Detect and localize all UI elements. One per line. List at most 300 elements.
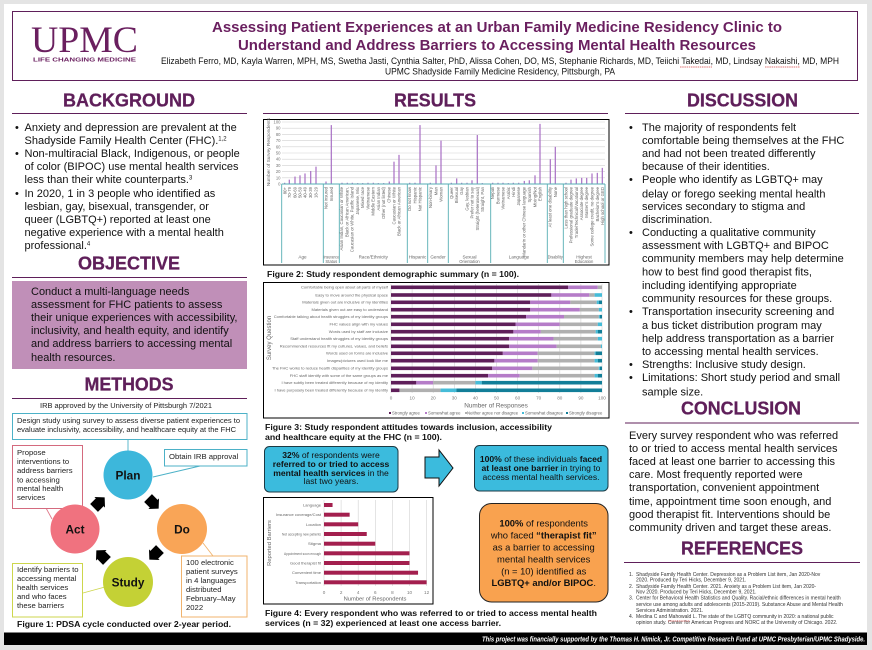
arrow: plan to do bbox=[143, 493, 164, 514]
reference list: Shadyside Family Health Center. Depression as a Problem List item, Jan 2020-Nov bbox=[636, 572, 821, 578]
reference list: 1. bbox=[629, 572, 633, 578]
reference list: Services Administration. 2021. bbox=[636, 608, 703, 614]
callout: electronic surveys: 2022 bbox=[186, 603, 203, 612]
chart: reported barriers bars: 8 bbox=[391, 590, 394, 595]
callout: therapist fit: as a barrier to accessing bbox=[493, 542, 595, 552]
legend: Neither agree nor disagree bbox=[467, 411, 519, 416]
category tick labels: Some college credit, no degree bbox=[590, 186, 594, 246]
category group labels: Orientation bbox=[459, 259, 480, 264]
authors: UPMC Shadyside Family Medicine Residency, Pittsburgh, PA bbox=[385, 66, 615, 76]
background bullets: negative experience with a mental health bbox=[24, 227, 224, 239]
conclusion text bbox=[629, 430, 838, 534]
callout: therapist fit: 100% of respondents bbox=[499, 518, 588, 528]
barrier labels: Good therapist fit bbox=[290, 560, 322, 565]
chart: attitudes stacked bars: 80 bbox=[557, 396, 563, 400]
category tick labels: Insured bbox=[329, 186, 334, 201]
background bullets: • bbox=[15, 188, 19, 200]
callout: electronic surveys bbox=[182, 556, 247, 617]
category tick labels: Gay, lesbian bbox=[464, 186, 470, 211]
circle: act: Act bbox=[65, 522, 85, 536]
category tick labels: Vietnamese bbox=[500, 186, 506, 210]
discussion bullets: Conducting a qualitative community bbox=[642, 227, 816, 239]
conclusion text: to or tried to access mental health services bbox=[629, 443, 838, 455]
conclusion text: good therapist fit. Interventions should be bbox=[629, 509, 830, 521]
callout: 32 percent referred: mental health services in the bbox=[273, 468, 389, 478]
barrier labels: Transportation bbox=[295, 580, 321, 585]
barrier labels: Convenient time bbox=[292, 570, 322, 575]
callout: propose interventions: address barriers bbox=[17, 466, 73, 475]
conclusion text: transportation, convenient appointment bbox=[629, 482, 819, 494]
chart: attitudes stacked bars: 10 bbox=[410, 396, 415, 400]
arrow: study to act bbox=[91, 545, 112, 566]
barrier labels: Insurance coverage/Cost bbox=[276, 512, 322, 517]
chart: reported barriers bars: 6 bbox=[374, 590, 377, 595]
authors bbox=[161, 56, 839, 76]
category tick labels: Bachelor's degree bbox=[595, 186, 600, 222]
discussion bullets: discrimination. bbox=[642, 214, 712, 226]
discussion bullets: Transportation insecurity screening and bbox=[642, 306, 834, 318]
discussion bullets: Strengths: Inclusive study design. bbox=[642, 359, 806, 371]
conclusion text: Every survey respondent who was referred bbox=[629, 430, 838, 442]
header banner bbox=[12, 12, 858, 80]
category tick labels: High school or GED bbox=[600, 187, 605, 225]
callout: propose interventions: to accessing bbox=[17, 476, 60, 484]
background bullets: 4 bbox=[87, 242, 91, 248]
discussion bullets: • bbox=[629, 372, 633, 384]
category tick labels: Less than high school bbox=[564, 187, 568, 229]
category group labels: Insurance bbox=[324, 254, 339, 260]
chart: demographic summary bars: 70 bbox=[276, 138, 281, 143]
panel: results bbox=[263, 90, 609, 628]
panel: methods bbox=[12, 374, 247, 629]
callout: therapist fit: who faced “therapist fit” bbox=[490, 530, 597, 540]
category tick labels: Caucasian or White, Pacific Island bbox=[350, 186, 354, 252]
chart: reported barriers bars: 4 bbox=[357, 590, 360, 595]
callout: therapist fit: mental health services bbox=[497, 554, 591, 564]
callout: 100 percent faced barrier bbox=[474, 446, 608, 491]
callout: 32 percent referred bbox=[264, 446, 398, 492]
background bullets: • bbox=[15, 122, 19, 134]
chart: demographic summary bars: 20 bbox=[276, 169, 281, 174]
callout: identify barriers: and who faces bbox=[17, 592, 67, 601]
discussion bullets: assessment with LGBTQ+ and BIPOC bbox=[642, 240, 829, 252]
category tick labels: Mixing/Not bbox=[532, 186, 538, 207]
background bullets: In 2020, 1 in 3 people who identified as bbox=[24, 188, 216, 200]
panel: conclusion bbox=[625, 398, 859, 534]
survey question labels: Recommended resources fit my cultures, values, and beliefs bbox=[280, 344, 388, 349]
category tick labels: Spanish bbox=[527, 186, 532, 203]
survey question labels: Comfortable being open about all parts of myself bbox=[301, 285, 389, 290]
footer funding bar bbox=[4, 632, 867, 645]
background bullets: Anxiety and depression are prevalent at the bbox=[24, 122, 237, 134]
category tick labels: Queer bbox=[449, 186, 454, 199]
barrier labels: Appointment soon enough bbox=[284, 551, 321, 556]
barrier labels: Stigma bbox=[308, 541, 322, 546]
survey question labels: Words used by staff are inclusive bbox=[329, 329, 389, 334]
chart: reported barriers bars: 10 bbox=[407, 590, 412, 595]
callout: identify barriers: health services bbox=[17, 583, 68, 592]
heading: methods: METHODS bbox=[84, 374, 174, 394]
survey question labels: Easy to move around the physical space bbox=[315, 292, 389, 297]
category tick labels: Asian Indian, Caucasian or White bbox=[339, 186, 344, 251]
category tick labels: Middle Eastern bbox=[370, 186, 376, 216]
logo: UPMC: UPMC bbox=[31, 20, 138, 61]
reference list: opinion study. Center for American Progress and NORC at the University of Chicago. 2022. bbox=[636, 620, 837, 626]
discussion bullets: Limitations: Short study period and small bbox=[642, 372, 840, 384]
panel: background bbox=[12, 90, 247, 252]
category group labels: Gender bbox=[430, 254, 446, 260]
heading: references: REFERENCES bbox=[681, 538, 803, 558]
circle: do bbox=[157, 504, 207, 554]
discussion bullets: community members may help determine bbox=[642, 253, 844, 265]
category tick labels: Japanese bbox=[516, 186, 521, 206]
category tick labels: Chinese bbox=[386, 186, 392, 203]
category group labels bbox=[298, 254, 594, 264]
chart: demographic summary bars: 40 bbox=[276, 157, 281, 162]
category tick labels: Burmese bbox=[496, 186, 500, 204]
category group labels: Status bbox=[325, 259, 337, 264]
background bullets: 1,2 bbox=[218, 136, 227, 142]
reference list: 3. bbox=[629, 596, 633, 602]
category tick labels: At least one disability bbox=[548, 186, 552, 227]
background bullets: 3 bbox=[189, 176, 193, 182]
chart: demographic summary bars: 0 bbox=[278, 182, 281, 186]
discussion bullets: People who identify as LGBTQ+ may bbox=[642, 174, 823, 186]
caption: figure 2: Figure 2: Study respondent demographic summary (n = 100). bbox=[267, 269, 519, 279]
title: Assessing Patient Experiences at an Urban Family Medicine Residency Clinic to bbox=[212, 20, 782, 36]
callout: design study: Design study using survey to assess diverse patient experiences to bbox=[17, 416, 240, 425]
discussion bullets: • bbox=[629, 122, 633, 134]
survey question labels: Materials given out are easy to understand bbox=[312, 307, 388, 312]
background bullets: less than their white counterparts. bbox=[24, 174, 189, 186]
arrow: act to plan bbox=[89, 492, 110, 513]
conclusion text: faced at least one barrier to accessing this bbox=[629, 456, 836, 468]
caption: figure 3: Figure 3: Study respondent attitudes towards inclusion, accessibility bbox=[265, 422, 552, 432]
discussion bullets: delay or forego seeking mental health bbox=[642, 188, 825, 200]
discussion bullets: services secondary to stigma and bbox=[642, 201, 805, 213]
circle: plan: Plan bbox=[116, 468, 140, 482]
callout: electronic surveys: distributed bbox=[186, 585, 221, 594]
background bullets: Shadyside Family Health Center (FHC). bbox=[24, 135, 218, 147]
discussion bullets: because of their identities. bbox=[642, 161, 770, 173]
category group labels: Education bbox=[575, 259, 594, 264]
category tick labels: Straight, Pan bbox=[480, 186, 485, 212]
objective box: their unique experiences with accessibility, bbox=[31, 312, 237, 324]
reference list: Shadyside Family Health Center. 2021. Anxiety as a Problem List item, Jan 2020- bbox=[636, 584, 816, 590]
category tick labels: English bbox=[538, 186, 542, 201]
background bullets: professional. bbox=[24, 240, 87, 252]
callout: therapist fit: LGBTQ+ and/or BIPOC. bbox=[491, 577, 596, 588]
reference list: 4. bbox=[629, 614, 633, 620]
caption: figure 3 bbox=[265, 422, 552, 442]
category group labels: Disability bbox=[548, 254, 563, 260]
panel: objective bbox=[12, 254, 247, 369]
category tick labels: 80+ bbox=[282, 187, 288, 194]
category tick labels: 40-49 bbox=[302, 186, 308, 198]
title: Understand and Address Barriers to Accessing Mental Health Resources bbox=[238, 38, 756, 54]
discussion bullets: sample size. bbox=[642, 386, 703, 398]
objective box bbox=[12, 281, 247, 369]
category tick labels: Associate degree bbox=[579, 186, 584, 220]
chart: demographic summary bars: 90 bbox=[276, 126, 281, 131]
survey question labels: Images/pictures used look like me bbox=[327, 358, 389, 363]
logo: UPMC: LIFE CHANGING MEDICINE bbox=[33, 58, 136, 64]
chart: reported barriers bars: 2 bbox=[340, 590, 343, 595]
legend: Strongly disagree bbox=[569, 411, 603, 416]
chart: demographic summary bars: 30 bbox=[276, 163, 281, 168]
callout: 32 percent referred: last two years. bbox=[304, 476, 358, 486]
callout: 32 percent referred: 32% of respondents were bbox=[282, 450, 380, 460]
category tick labels: Mixed race bbox=[360, 186, 365, 208]
authors: Elizabeth Ferro, MD, Kayla Warren, MPH, MS, Swetha Jasti, Cynthia Salter, PhD, Alissa Cohen, DO, MS, Stephanie Richards, MD, Teiichi Takedai, MD, Lindsay Nakaishi, MD, MPH bbox=[161, 56, 839, 66]
category group labels: Language bbox=[509, 254, 530, 260]
category tick labels: 60-69 bbox=[292, 186, 298, 198]
discussion bullets bbox=[629, 122, 844, 398]
callout: propose interventions: Propose bbox=[17, 448, 46, 457]
callout: 32 percent referred: referred to or tried to access bbox=[273, 459, 389, 469]
heading: conclusion: CONCLUSION bbox=[681, 398, 801, 418]
panel: references bbox=[624, 538, 860, 626]
objective box: Conduct a multi-language needs bbox=[31, 286, 190, 298]
callout: 100 percent faced barrier: access mental health services. bbox=[482, 472, 600, 482]
chart: attitudes stacked bars: 60 bbox=[515, 396, 521, 400]
survey question labels: The FHC works to reduce health disparities of my identity groups bbox=[272, 366, 388, 371]
discussion bullets: a bus ticket distribution program may bbox=[642, 320, 822, 332]
chart: attitudes stacked bars: 20 bbox=[431, 396, 436, 400]
chart: demographic summary bars: 50 bbox=[276, 150, 281, 156]
category tick labels: 18-29 bbox=[314, 186, 318, 198]
category tick labels: Bisexual bbox=[454, 187, 459, 203]
callout: electronic surveys: 100 electronic bbox=[186, 558, 234, 567]
discussion bullets: help address transportation as a barrier bbox=[642, 333, 834, 345]
category tick labels: Non-binary bbox=[428, 186, 433, 208]
callout: electronic surveys: patient surveys bbox=[186, 567, 238, 576]
chart: reported barriers bars: 0 bbox=[323, 590, 326, 595]
chart: reported barriers bars: 12 bbox=[424, 590, 430, 595]
survey question labels: Words used on forms are inclusive bbox=[326, 351, 389, 356]
survey question labels: I have purposely been treated differently because of my identity bbox=[274, 388, 389, 393]
reference list: service use among adults and adolescents (2015-2019). Substance Abuse and Mental Health bbox=[636, 602, 843, 608]
heading: background: BACKGROUND bbox=[63, 90, 195, 110]
category group labels: Highest bbox=[576, 254, 593, 260]
chart: reported barriers bars: Reported Barriers bbox=[267, 520, 273, 566]
callout: therapist fit bbox=[480, 504, 608, 602]
category tick labels: Caucasian or White bbox=[392, 186, 396, 224]
chart: reported barriers bars bbox=[264, 498, 433, 604]
category tick labels: Other (not listed) bbox=[381, 186, 386, 219]
IRB note: IRB approved by the University of Pittsburgh 7/2021 bbox=[40, 401, 212, 410]
circle: act bbox=[50, 504, 100, 554]
category tick labels: Not Hispanic bbox=[418, 186, 422, 211]
callout: design study bbox=[12, 414, 247, 440]
objective box: health resources. bbox=[31, 352, 115, 364]
legend bbox=[389, 411, 603, 416]
category tick labels: Straight (heterosexual) bbox=[475, 186, 480, 230]
reference list: Nov 2020. Produced by Teri Hicks, December 9, 2021. bbox=[636, 590, 757, 596]
category group labels: Hispanic bbox=[409, 254, 427, 260]
chart: attitudes stacked bars: 50 bbox=[494, 396, 499, 400]
circle: do: Do bbox=[174, 522, 190, 536]
survey question labels: I have subtly been treated differently because of my identity bbox=[281, 380, 389, 385]
objective box: inclusivity, and health equity, and identify bbox=[31, 325, 229, 337]
chart: attitudes stacked bars bbox=[264, 282, 609, 418]
callout: 100 percent faced barrier: at least one barrier in trying to bbox=[482, 463, 601, 473]
callout: propose interventions: mental health bbox=[17, 484, 63, 493]
category tick labels: Master's degree bbox=[584, 186, 589, 218]
discussion bullets: • bbox=[629, 174, 633, 186]
circle: plan bbox=[104, 450, 152, 500]
legend: Strongly agree bbox=[392, 411, 421, 416]
background bullets: Non-multiracial Black, Indigenous, or people bbox=[24, 148, 240, 160]
category tick labels: Black or African American bbox=[396, 186, 402, 236]
caption: figure 4: Figure 4: Every respondent who was referred to or tried to access mental health bbox=[265, 608, 597, 618]
category tick labels: Black or African American, bbox=[344, 187, 350, 237]
callout: identify barriers: these barriers bbox=[17, 601, 64, 610]
category tick labels: 70-79 bbox=[287, 186, 292, 198]
reference list: 2020. Produced by Teri Hicks, December 9, 2021. bbox=[636, 578, 746, 584]
survey question labels: FHC staff identify with some of the same groups as me bbox=[290, 373, 389, 378]
title bbox=[212, 20, 782, 54]
category tick labels: Asian Indian bbox=[376, 186, 381, 211]
reference list bbox=[629, 572, 843, 626]
caption: figure 3: and healthcare equity at the FHC (n = 100). bbox=[265, 432, 442, 442]
category tick labels: 30-39 bbox=[308, 186, 313, 198]
category tick labels: 50-59 bbox=[298, 186, 302, 198]
discussion bullets: how to best find good therapist fits, bbox=[642, 266, 812, 278]
chart: demographic summary bars: 10 bbox=[276, 175, 281, 180]
callout: therapist fit: (n = 10) identified as bbox=[501, 566, 587, 576]
circle: study: Study bbox=[112, 576, 145, 590]
category tick labels: Man bbox=[434, 186, 438, 195]
callout: propose interventions: services bbox=[17, 493, 45, 502]
chart: demographic summary bars bbox=[264, 117, 609, 265]
background bullets: lesbian, gay, bisexual, transgender, or bbox=[24, 201, 209, 213]
chart: demographic summary bars: 60 bbox=[276, 144, 281, 149]
reference list: 2. bbox=[629, 584, 633, 590]
chart: attitudes stacked bars: 90 bbox=[578, 396, 584, 400]
caption: figure 4 bbox=[265, 608, 597, 628]
category tick labels: Trade/Technical/Vocational bbox=[574, 187, 579, 238]
discussion bullets: and had not been treated differently bbox=[642, 148, 816, 160]
background bullets: • bbox=[15, 148, 19, 160]
category tick labels: Nepali bbox=[490, 187, 495, 199]
conclusion text: time, appointment time soon enough, and bbox=[629, 496, 831, 508]
caption: figure 4: services (n = 32) experienced at least one access barrier. bbox=[265, 618, 501, 628]
barrier labels bbox=[276, 502, 322, 585]
callout: obtain IRB: Obtain IRB approval bbox=[169, 452, 239, 461]
category tick labels: Hindi bbox=[511, 187, 516, 197]
reference list: Center for Behavioral Health Statistics and Quality. Racial/ethnic differences in mental health bbox=[636, 596, 841, 602]
callout: 100 percent faced barrier: 100% of these individuals faced bbox=[480, 454, 602, 464]
discussion bullets: to accessing mental health services. bbox=[642, 346, 819, 358]
callout: identify barriers bbox=[12, 564, 82, 617]
category group labels: Sexual bbox=[462, 254, 477, 260]
category tick labels: Do not know bbox=[407, 186, 412, 211]
chart: reported barriers bars: Number of Respondents bbox=[344, 596, 407, 602]
heading: objective: OBJECTIVE bbox=[78, 254, 180, 274]
callout: identify barriers: accessing mental bbox=[17, 574, 77, 583]
arrow: to barrier callout bbox=[425, 450, 453, 486]
legend: Somewhat agree bbox=[428, 411, 461, 416]
background bullets: of color (BIPOC) use mental health services bbox=[24, 161, 239, 173]
chart: attitudes stacked bars: 70 bbox=[536, 396, 542, 400]
survey question labels: Comfortable talking about health struggles of my identity groups bbox=[274, 314, 388, 319]
chart: demographic summary bars: 100 bbox=[274, 120, 281, 124]
category tick labels bbox=[282, 186, 605, 257]
chart: attitudes stacked bars: Survey Question bbox=[267, 316, 273, 360]
category tick labels: Japanese, Mix bbox=[355, 186, 360, 215]
callout: identify barriers: Identify barriers to bbox=[17, 565, 79, 574]
callout: propose interventions bbox=[12, 446, 82, 508]
arrow: do to study bbox=[144, 544, 165, 565]
category tick labels: Not insured bbox=[324, 186, 328, 209]
chart: attitudes stacked bars: 100 bbox=[598, 396, 606, 400]
chart: attitudes stacked bars: 0 bbox=[390, 396, 393, 400]
connector lines bbox=[46, 439, 213, 593]
objective box: and address barriers to accessing mental bbox=[31, 338, 232, 350]
category tick labels: Gay bbox=[459, 186, 464, 195]
discussion bullets: • bbox=[629, 306, 633, 318]
callout: design study: evaluate inclusivity, accessibility, and healthcare equity at the FHC bbox=[17, 425, 236, 434]
callout: electronic surveys: in 4 languages bbox=[186, 576, 236, 585]
conclusion text: care. Most frequently reported were bbox=[629, 469, 803, 481]
callout: obtain IRB bbox=[164, 450, 247, 466]
category tick labels: Arabic bbox=[506, 186, 511, 199]
circle: study bbox=[103, 557, 153, 607]
category tick labels: Hispanic bbox=[412, 186, 418, 203]
category group labels: Age bbox=[298, 254, 307, 260]
reference list: Medina C and Mahowald L. The state of the LGBTQ community in 2020: a national public bbox=[636, 614, 834, 620]
survey question labels: Staff understand health struggles of my identity groups bbox=[290, 336, 388, 341]
category tick labels: Woman bbox=[438, 186, 444, 202]
callout: electronic surveys: February–May bbox=[186, 594, 236, 603]
category tick labels: Mandarin or other Chinese language bbox=[522, 186, 526, 257]
category tick labels: None bbox=[553, 186, 558, 197]
survey question labels: Materials given out are inclusive of my identities bbox=[302, 300, 388, 305]
heading: results: RESULTS bbox=[394, 90, 476, 110]
background bullets: queer (LGBTQ+) reported at least one bbox=[24, 214, 211, 226]
panel: discussion bbox=[625, 90, 859, 398]
survey question labels: FHC values align with my values bbox=[330, 322, 388, 327]
chart: demographic summary bars: Number of Survey Respondents bbox=[266, 117, 272, 186]
discussion bullets: • bbox=[629, 359, 633, 371]
objective box: assessment for FHC patients to assess bbox=[31, 299, 223, 311]
discussion bullets: comfortable being themselves at the FHC bbox=[642, 135, 844, 147]
category group labels: Race/Ethnicity bbox=[359, 254, 389, 260]
category tick labels: Professional graduate degree bbox=[568, 186, 574, 243]
callout: propose interventions: interventions to bbox=[17, 457, 69, 466]
barrier labels: Language bbox=[303, 502, 322, 507]
chart: attitudes stacked bars: 30 bbox=[452, 396, 457, 400]
discussion bullets: including identifying appropriate bbox=[642, 280, 797, 292]
discussion bullets: • bbox=[629, 227, 633, 239]
barrier labels: Location bbox=[306, 522, 321, 527]
discussion bullets: community resources for these groups. bbox=[642, 293, 832, 305]
discussion bullets: The majority of respondents felt bbox=[642, 122, 796, 134]
barrier labels: Not accepting new patients bbox=[282, 531, 321, 536]
chart: attitudes stacked bars: Number of Responses bbox=[464, 402, 528, 410]
chart: demographic summary bars: 80 bbox=[276, 132, 281, 137]
legend: Somewhat disagree bbox=[525, 411, 564, 416]
survey question labels bbox=[272, 285, 389, 393]
background bullets bbox=[15, 122, 240, 252]
chart: attitudes stacked bars: 40 bbox=[473, 396, 478, 400]
heading: discussion: DISCUSSION bbox=[687, 90, 798, 110]
conclusion text: community driven and target these areas. bbox=[629, 522, 831, 534]
category tick labels: Vietnamese bbox=[366, 186, 370, 210]
category tick labels: Prefer not to say bbox=[470, 186, 474, 219]
caption: figure 1: Figure 1: PDSA cycle conducted over 2-year period. bbox=[17, 620, 231, 629]
